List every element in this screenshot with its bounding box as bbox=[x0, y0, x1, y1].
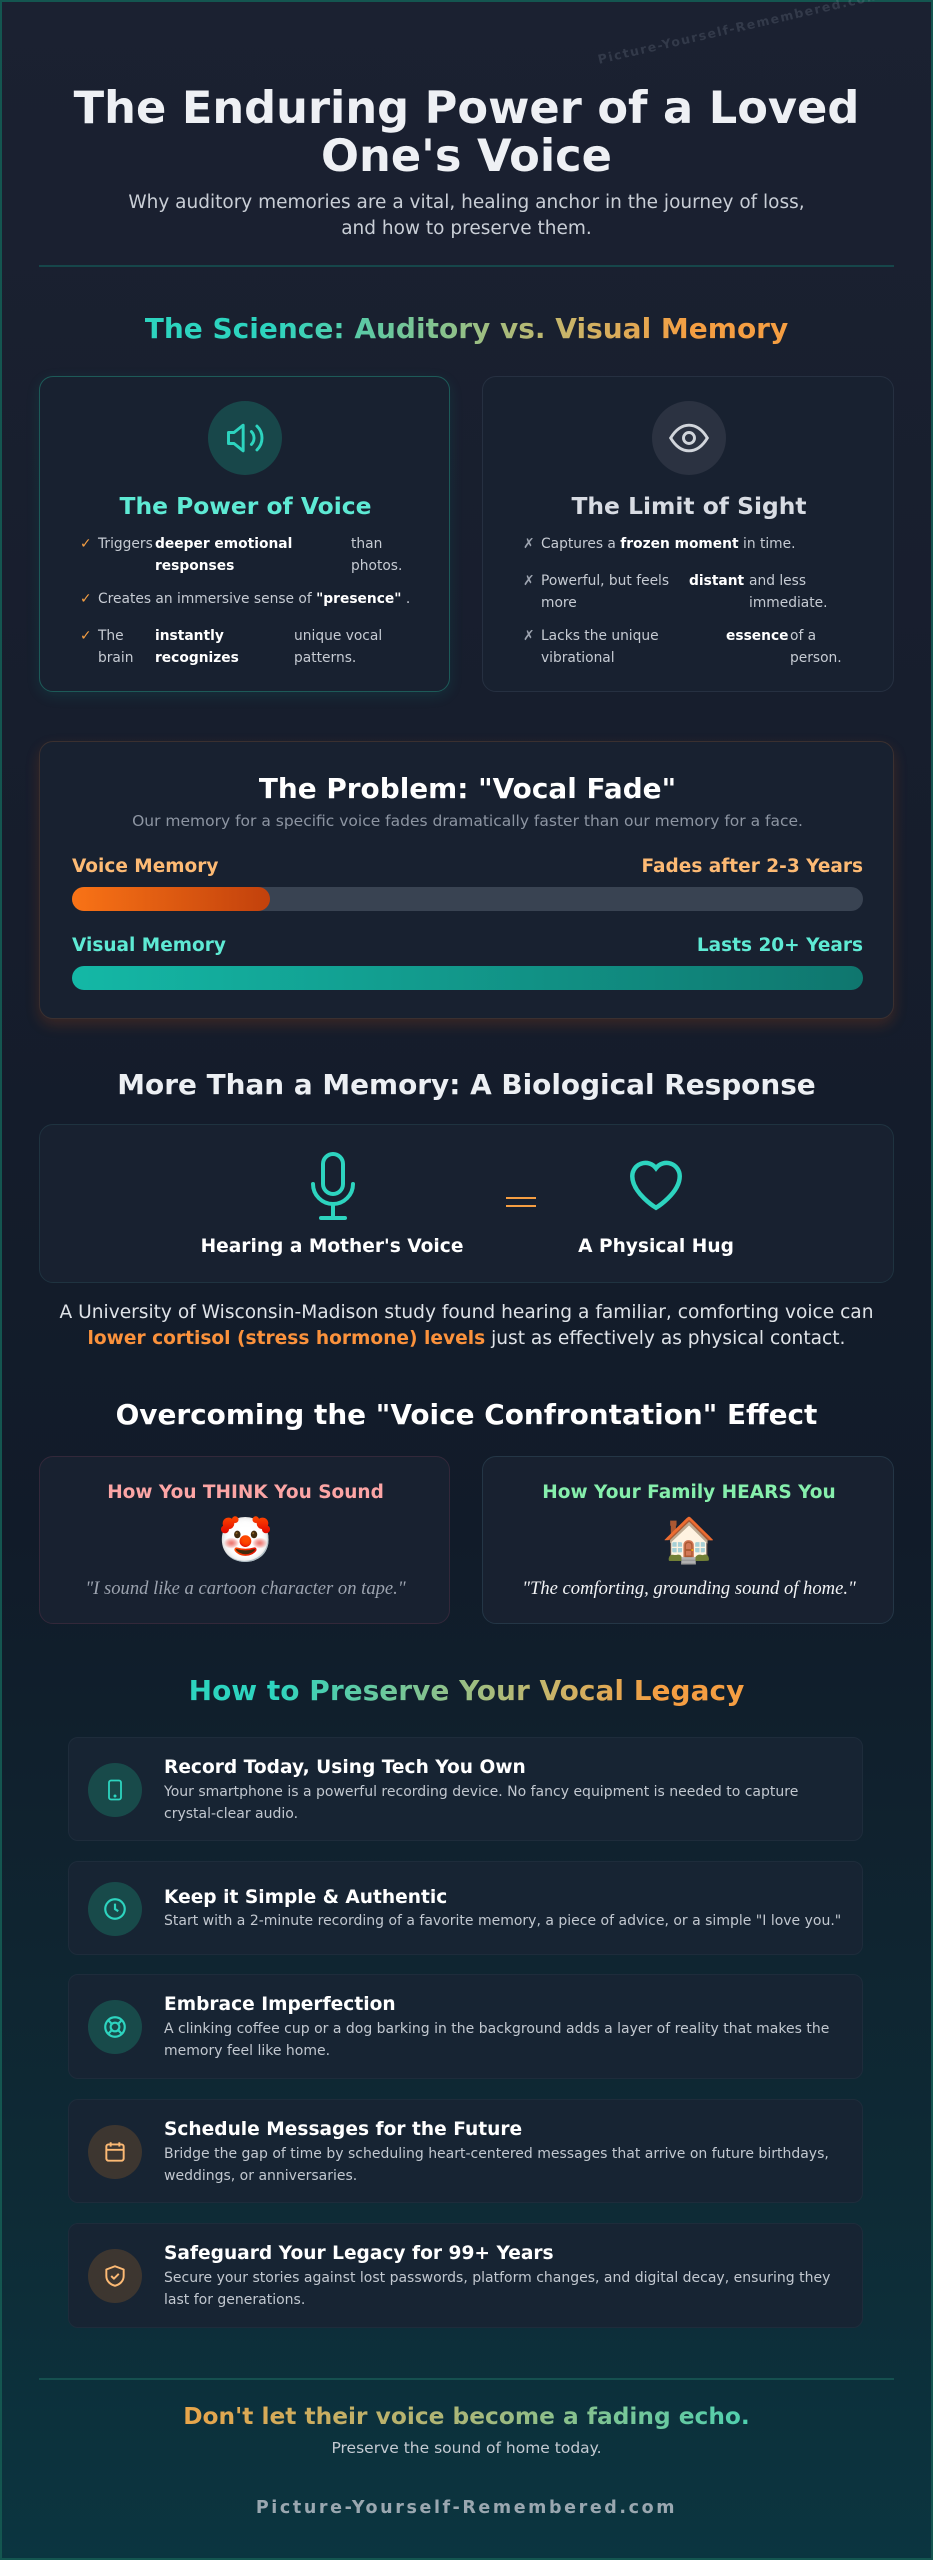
equals sign bbox=[506, 1197, 536, 1207]
study text: lower cortisol (stress hormone) levels just as effectively as physical contact. bbox=[88, 1328, 845, 1349]
panel: think you sound: How You THINK You Sound bbox=[107, 1482, 384, 1503]
panel: power of voice: Creates an immersive sense of "presence" . bbox=[98, 591, 410, 607]
step 3 bbox=[68, 1974, 863, 2079]
panel: limit of sight: Captures a frozen moment in time. bbox=[541, 536, 796, 552]
panel: think you sound: "I sound like a cartoon character on tape." bbox=[85, 1578, 406, 1599]
panel: power of voice: Triggers bbox=[98, 536, 153, 552]
bullets bbox=[80, 536, 410, 666]
cta subtitle: Preserve the sound of home today. bbox=[331, 2439, 602, 2457]
icon: calendar bbox=[88, 2125, 142, 2179]
title: The Enduring Power of a Loved bbox=[74, 82, 859, 134]
bar chart: visual memory: Visual Memory bbox=[72, 935, 226, 956]
step 3: A clinking coffee cup or a dog barking in the background adds a layer of reality that makes the memory feel like home. bbox=[164, 2021, 829, 2059]
study text bbox=[60, 1302, 873, 1349]
heading: preserve legacy: How to Preserve Your Vocal Legacy bbox=[189, 1674, 744, 1707]
card title: The Limit of Sight bbox=[571, 492, 807, 520]
panel: limit of sight: ✗ bbox=[523, 536, 535, 552]
panel: power of voice: deeper emotional responses bbox=[155, 536, 292, 574]
icon: microphone bbox=[311, 1152, 355, 1220]
step 3: Embrace Imperfection bbox=[164, 1994, 396, 2015]
panel: power of voice: than photos. bbox=[351, 536, 402, 574]
panel: limit of sight bbox=[482, 376, 894, 692]
panel: power of voice: unique vocal patterns. bbox=[294, 628, 382, 666]
subtitle: Why auditory memories are a vital, healing anchor in the journey of loss, bbox=[128, 192, 805, 213]
bar chart: voice memory bbox=[72, 856, 863, 911]
subtitle bbox=[128, 192, 805, 239]
panel: power of voice: ✓ bbox=[80, 628, 92, 644]
bar chart: visual memory bbox=[72, 935, 863, 990]
problem title: The Problem: "Vocal Fade" bbox=[259, 772, 676, 805]
panel: limit of sight: ✗ bbox=[523, 628, 535, 644]
icon: phone bbox=[88, 1763, 142, 1817]
panel: limit of sight: ✗ bbox=[523, 573, 535, 589]
panel: limit of sight: of a person. bbox=[790, 628, 842, 666]
step 5: Safeguard Your Legacy for 99+ Years bbox=[164, 2243, 554, 2264]
panel: family hears bbox=[482, 1456, 894, 1624]
panel: limit of sight: and less immediate. bbox=[749, 573, 828, 611]
subtitle: and how to preserve them. bbox=[341, 218, 592, 239]
panel: limit of sight: essence bbox=[726, 628, 788, 644]
step 2: Keep it Simple & Authentic bbox=[164, 1887, 447, 1908]
panel: think you sound bbox=[39, 1456, 450, 1624]
icon: clock bbox=[88, 1882, 142, 1936]
title: One's Voice bbox=[321, 130, 612, 182]
panel: voice equals hug bbox=[39, 1124, 894, 1283]
panel: power of voice bbox=[39, 376, 450, 692]
bullets bbox=[523, 536, 842, 666]
panel: limit of sight: distant bbox=[689, 573, 744, 589]
step 4: Schedule Messages for the Future bbox=[164, 2119, 522, 2140]
call to action: Don't let their voice become a fading echo. bbox=[183, 2403, 750, 2430]
step 4: Bridge the gap of time by scheduling heart-centered messages that arrive on future birthdays, weddings, or anniversaries. bbox=[164, 2146, 829, 2184]
panel: power of voice: The brain bbox=[98, 628, 133, 666]
heading: science: The Science: Auditory vs. Visual Memory bbox=[145, 312, 788, 345]
step 1: Record Today, Using Tech You Own bbox=[164, 1757, 526, 1778]
icon: eye bbox=[652, 401, 726, 475]
bar chart: visual memory: Lasts 20+ Years bbox=[697, 935, 863, 956]
title bbox=[74, 82, 859, 182]
panel: vocal fade bbox=[39, 741, 894, 1019]
panel: power of voice: ✓ bbox=[80, 536, 92, 552]
label: mother's voice: Hearing a Mother's Voice bbox=[201, 1236, 463, 1257]
icon: house emoji: 🏠 bbox=[662, 1515, 716, 1566]
panel: limit of sight: Powerful, but feels more bbox=[541, 573, 669, 611]
icon: clown emoji: 🤡 bbox=[218, 1515, 273, 1566]
bar chart: voice memory: Voice Memory bbox=[72, 856, 218, 877]
card title: The Power of Voice bbox=[119, 492, 372, 520]
panel: limit of sight: Lacks the unique vibrational bbox=[541, 628, 659, 666]
step 4 bbox=[68, 2099, 863, 2203]
panel: power of voice: ✓ bbox=[80, 591, 92, 607]
step 1 bbox=[68, 1737, 863, 1841]
step 5 bbox=[68, 2223, 863, 2328]
panel: family hears: "The comforting, grounding sound of home." bbox=[522, 1578, 856, 1599]
panel: power of voice: instantly recognizes bbox=[155, 628, 239, 666]
step 1: Your smartphone is a powerful recording device. No fancy equipment is needed to capture crystal-clear audio. bbox=[164, 1784, 798, 1822]
panel: family hears: How Your Family HEARS You bbox=[542, 1482, 836, 1503]
heading: voice confrontation: Overcoming the "Voice Confrontation" Effect bbox=[116, 1398, 817, 1431]
heading: biological response: More Than a Memory: A Biological Response bbox=[117, 1068, 816, 1101]
step 2: Start with a 2-minute recording of a favorite memory, a piece of advice, or a simple "I love you." bbox=[164, 1913, 841, 1929]
problem subtitle: Our memory for a specific voice fades dramatically faster than our memory for a face. bbox=[132, 812, 803, 830]
icon: speaker bbox=[208, 401, 282, 475]
study text: A University of Wisconsin-Madison study found hearing a familiar, comforting voice can bbox=[60, 1302, 873, 1323]
label: hug: A Physical Hug bbox=[578, 1236, 734, 1257]
footer brand: Picture-Yourself-Remembered.com bbox=[256, 2498, 677, 2518]
icon: lifebuoy bbox=[88, 2000, 142, 2054]
bar chart: voice memory: Fades after 2-3 Years bbox=[642, 856, 863, 877]
icon: shield bbox=[88, 2249, 142, 2303]
step 2 bbox=[68, 1861, 863, 1955]
icon: heart bbox=[630, 1160, 682, 1210]
step 5: Secure your stories against lost passwords, platform changes, and digital decay, ensuring they last for generations. bbox=[164, 2270, 830, 2308]
